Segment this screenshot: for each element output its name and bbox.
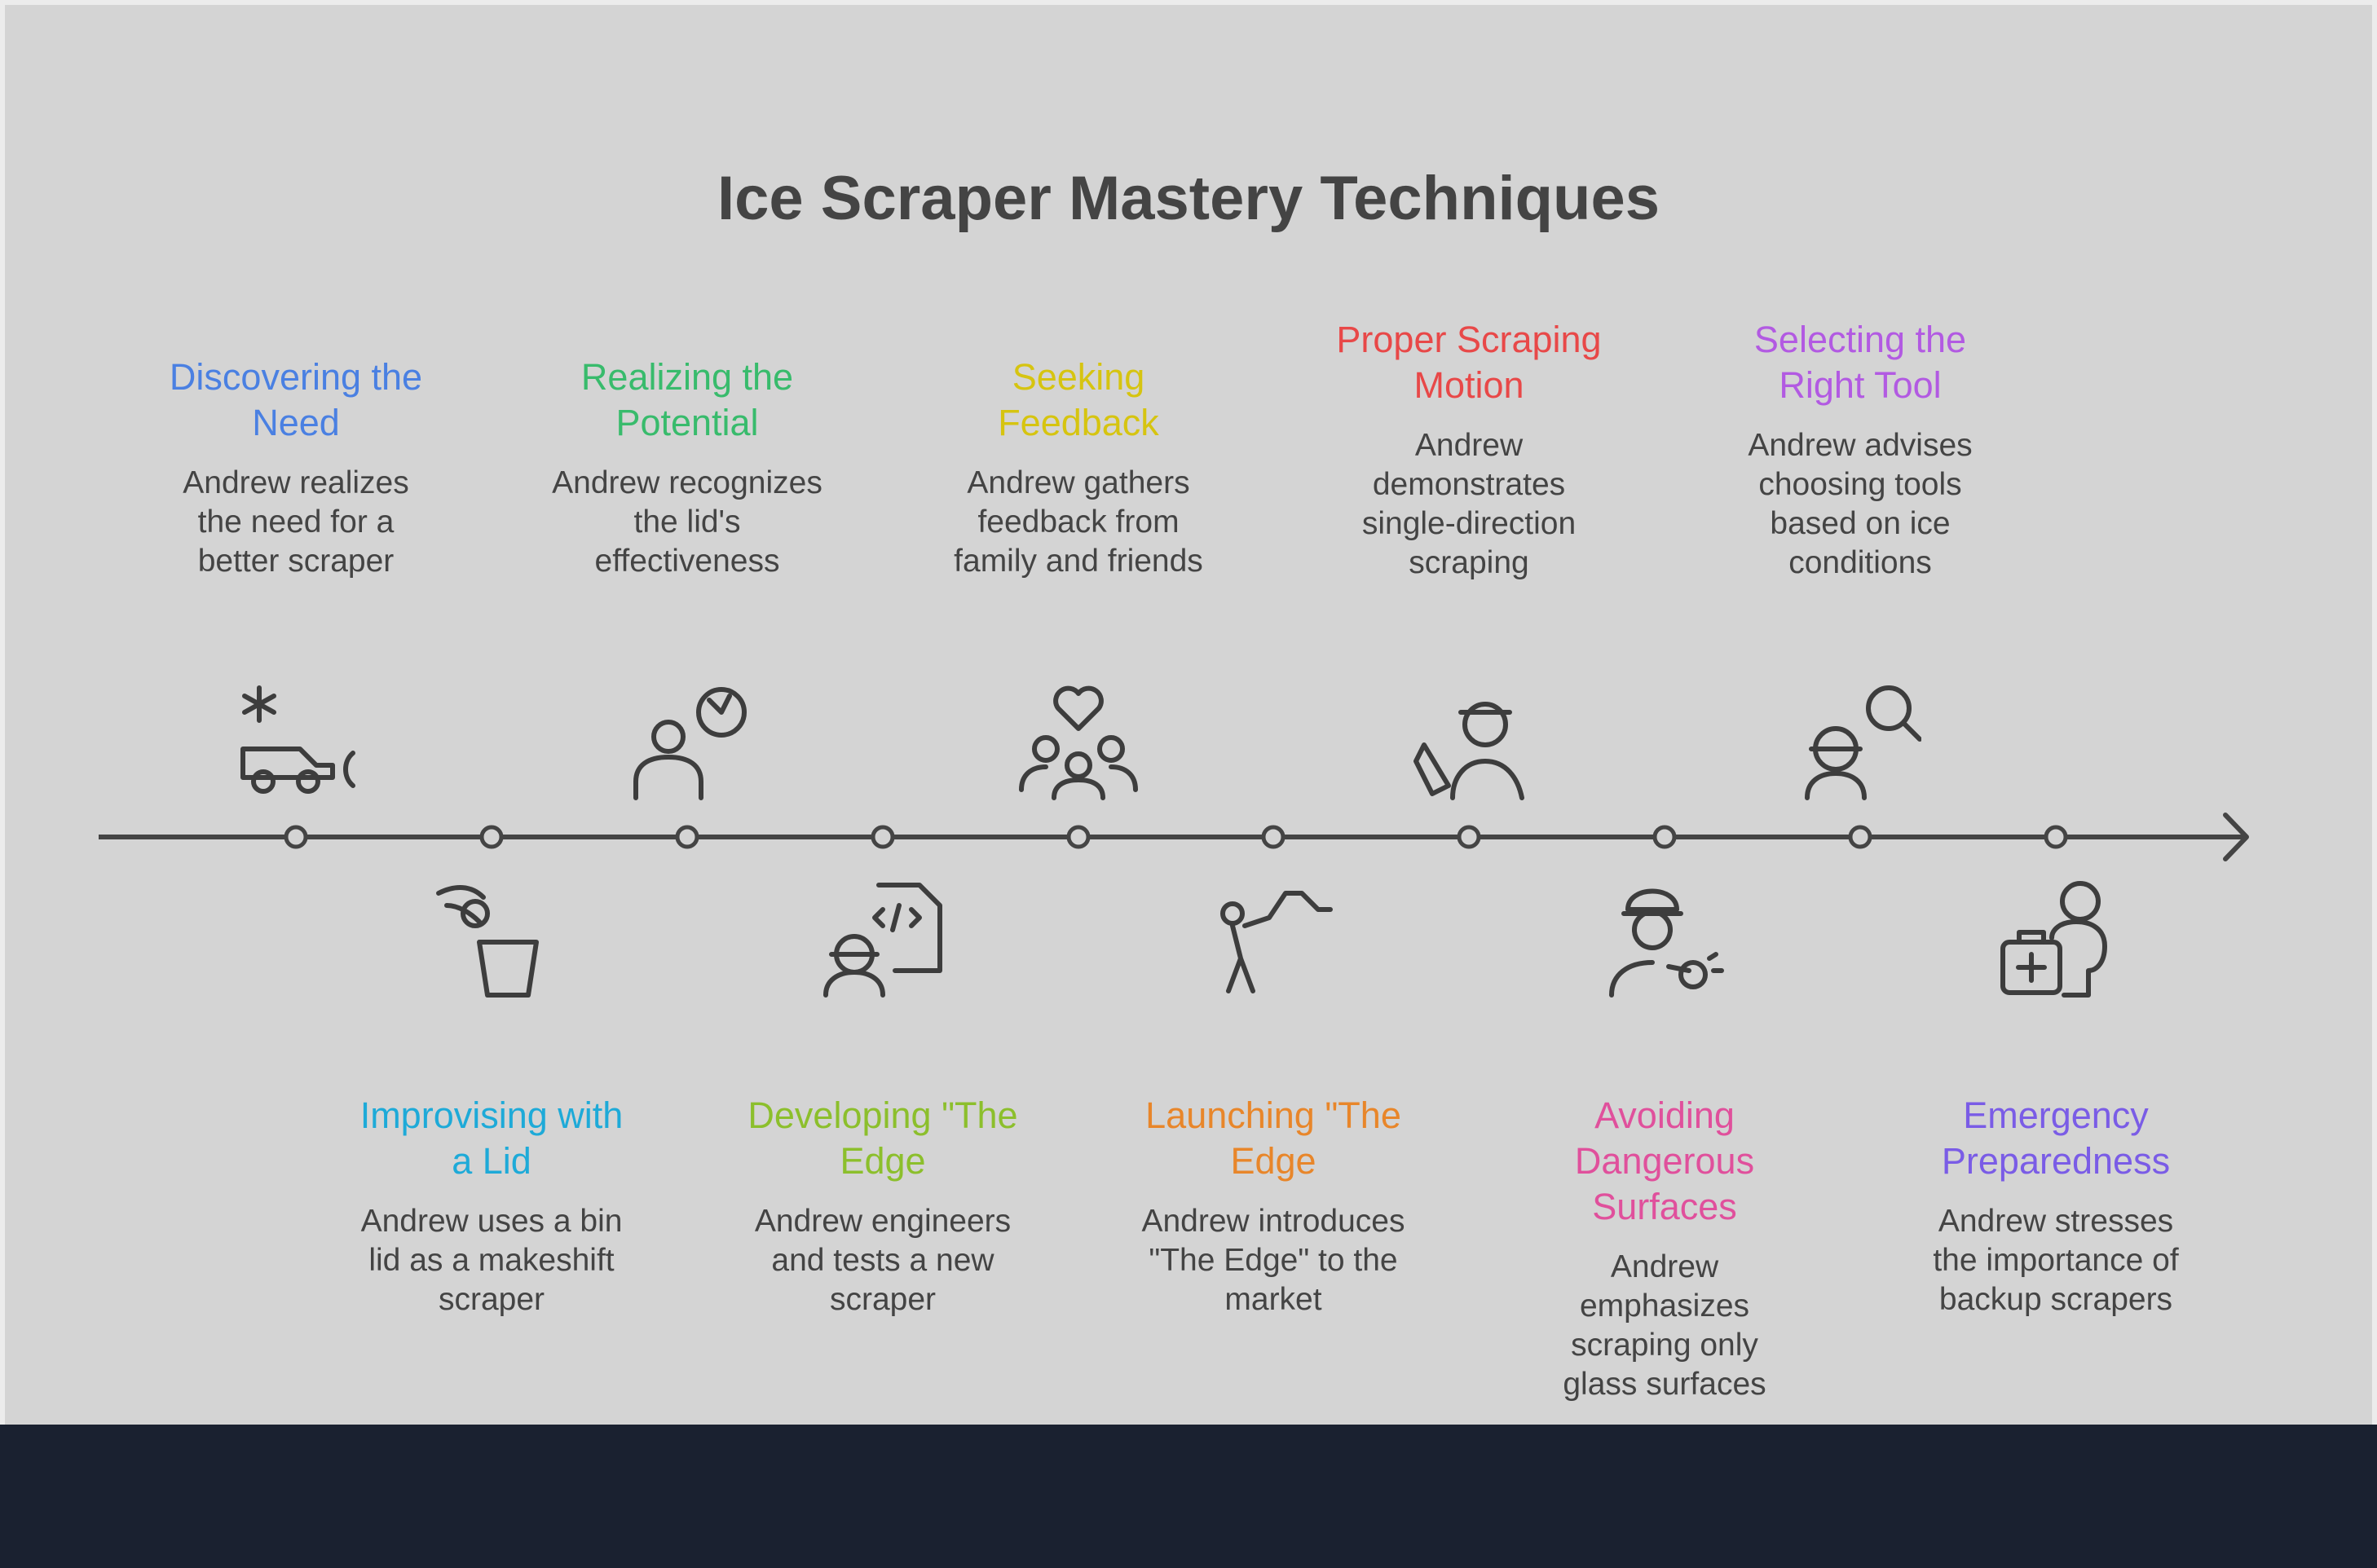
- step 8 text: [1563, 1095, 1766, 1402]
- step 3 text: Realizing the: [581, 356, 793, 398]
- step 5 text: feedback from: [977, 504, 1180, 540]
- step 4 text: and tests a new: [771, 1243, 994, 1278]
- step 1 text: Discovering the: [170, 356, 422, 398]
- step 2 text: lid as a makeshift: [368, 1243, 615, 1278]
- step 6 text: Launching "The: [1145, 1095, 1401, 1136]
- step 7 text: single-direction: [1362, 506, 1576, 541]
- step 6 text: [1141, 1095, 1405, 1317]
- step 6 text: Edge: [1230, 1140, 1316, 1182]
- step 9 text: [1748, 319, 1973, 580]
- step 9 text: Selecting the: [1754, 319, 1966, 360]
- step 7 text: Proper Scraping: [1336, 319, 1602, 360]
- step 10 text: Andrew stresses: [1938, 1204, 2173, 1239]
- step 2 text: scraper: [439, 1282, 545, 1317]
- step 9 text: Right Tool: [1779, 364, 1942, 406]
- step 6 text: "The Edge" to the: [1149, 1243, 1398, 1278]
- step 7 text: Andrew: [1415, 428, 1523, 463]
- step 4 text: Edge: [840, 1140, 926, 1182]
- step 1 text: Need: [252, 402, 340, 443]
- step 7 text: scraping: [1409, 545, 1529, 580]
- icon: worker scraping: [1413, 702, 1524, 800]
- step 8 text: Dangerous: [1575, 1140, 1754, 1182]
- step 5 text: Feedback: [998, 402, 1159, 443]
- step 10 text: Emergency: [1963, 1095, 2149, 1136]
- step 6 text: market: [1224, 1282, 1322, 1317]
- step 9 text: Andrew advises: [1748, 428, 1973, 463]
- step 8 text: scraping only: [1571, 1328, 1758, 1363]
- step 3 text: Andrew recognizes: [552, 465, 822, 500]
- step 5 text: family and friends: [954, 544, 1203, 579]
- step 7 text: Motion: [1413, 364, 1524, 406]
- icon: person with refresh: [633, 687, 747, 800]
- step 1 text: Andrew realizes: [183, 465, 409, 500]
- icon: worker with code doc: [823, 883, 942, 998]
- icon: hand with lid and bucket: [436, 885, 539, 998]
- step 10 text: the importance of: [1933, 1243, 2179, 1278]
- step 3 text: [552, 356, 822, 579]
- step 1 text: the need for a: [198, 504, 394, 540]
- step 5 text: [954, 356, 1203, 579]
- step 2 text: Andrew uses a bin: [361, 1204, 622, 1239]
- title: Ice Scraper Mastery Techniques: [717, 164, 1660, 233]
- step 8 text: Andrew: [1611, 1249, 1718, 1284]
- step 5 text: Andrew gathers: [967, 465, 1190, 500]
- step 10 text: backup scrapers: [1939, 1282, 2172, 1317]
- icon: people with heart: [1019, 686, 1138, 800]
- step 8 text: emphasizes: [1580, 1288, 1749, 1324]
- step 4 text: [747, 1095, 1018, 1317]
- step 8 text: glass surfaces: [1563, 1367, 1766, 1402]
- icon: worker with magnifier: [1805, 685, 1921, 800]
- step 2 text: [360, 1095, 623, 1317]
- step 2 text: a Lid: [452, 1140, 531, 1182]
- step 2 text: Improvising with: [360, 1095, 623, 1136]
- icon: first aid kit with person: [2000, 881, 2107, 998]
- step 7 text: [1336, 319, 1602, 580]
- step 10 text: Preparedness: [1942, 1140, 2170, 1182]
- icon: worker with tool: [1609, 888, 1724, 998]
- step 4 text: Andrew engineers: [755, 1204, 1011, 1239]
- icon: person launching: [1220, 891, 1333, 993]
- step 10 text: [1933, 1095, 2179, 1317]
- step 9 text: based on ice: [1770, 506, 1951, 541]
- step 4 text: scraper: [830, 1282, 936, 1317]
- step 3 text: Potential: [615, 402, 759, 443]
- step 3 text: the lid's: [633, 504, 740, 540]
- step 7 text: demonstrates: [1373, 467, 1565, 502]
- icon: car with snowflake: [240, 685, 355, 794]
- step 9 text: choosing tools: [1758, 467, 1962, 502]
- step 3 text: effectiveness: [595, 544, 779, 579]
- step 9 text: conditions: [1788, 545, 1932, 580]
- step 8 text: Surfaces: [1592, 1186, 1737, 1227]
- step 1 text: [170, 356, 422, 579]
- step 5 text: Seeking: [1012, 356, 1144, 398]
- step 4 text: Developing "The: [747, 1095, 1018, 1136]
- step 1 text: better scraper: [198, 544, 394, 579]
- step 8 text: Avoiding: [1594, 1095, 1735, 1136]
- step 6 text: Andrew introduces: [1141, 1204, 1405, 1239]
